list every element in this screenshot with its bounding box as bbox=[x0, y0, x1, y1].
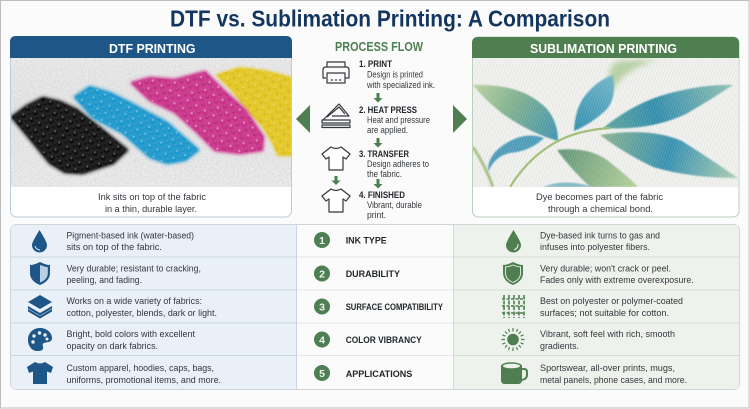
heading: SUBLIMATION PRINTING bbox=[530, 41, 677, 56]
arrow: step 1 to 2 bbox=[374, 93, 382, 102]
icon: sun bbox=[502, 328, 524, 351]
DTF ink type text bbox=[66, 230, 194, 253]
step 1 text: 1. PRINT bbox=[359, 59, 392, 70]
DTF applications text bbox=[66, 363, 221, 386]
icon: finished t-shirt bbox=[322, 189, 350, 212]
arrow: pointing to DTF panel bbox=[296, 105, 310, 133]
DTF ink type text: Pigment-based ink (water-based) bbox=[66, 230, 194, 242]
caption: in a thin, durable layer. bbox=[105, 204, 197, 215]
icon: blue drop bbox=[32, 230, 47, 253]
row 1: ink type: 1 bbox=[319, 235, 325, 247]
photo: ink droplets on fabric bbox=[11, 58, 292, 187]
header bar bbox=[472, 37, 739, 58]
sublimation applications text bbox=[540, 363, 687, 386]
process flow heading: PROCESS FLOW bbox=[335, 39, 424, 54]
icon: palette bbox=[28, 328, 52, 351]
caption: Ink sits on top of the fabric bbox=[98, 192, 206, 203]
heading: DTF PRINTING bbox=[109, 41, 196, 56]
icon: blue shield bbox=[30, 262, 50, 285]
step 2 text bbox=[359, 105, 430, 136]
DTF durability text: peeling, and fading. bbox=[66, 275, 142, 286]
process flow bbox=[322, 39, 435, 221]
step 2 text: are applied. bbox=[367, 125, 408, 136]
step 3 text: the fabric. bbox=[367, 169, 402, 180]
sublimation ink type text: Dye-based ink turns to gas and bbox=[540, 230, 660, 242]
arrow: pointing to sublimation panel bbox=[453, 105, 467, 133]
DTF color vibrancy text: opacity on dark fabrics. bbox=[66, 341, 158, 352]
DTF applications text: Custom apparel, hoodies, caps, bags, bbox=[66, 363, 214, 374]
panel: sublimation printing bbox=[472, 37, 739, 217]
sublimation column background bbox=[453, 225, 739, 389]
title: DTF vs. Sublimation Printing: A Comparison bbox=[170, 6, 610, 32]
sublimation durability text bbox=[540, 264, 694, 286]
icon: polyester weave bbox=[502, 295, 525, 318]
row 3: surface compatibility bbox=[314, 298, 443, 314]
icon: mug bbox=[501, 362, 527, 384]
icon: layers bbox=[28, 295, 52, 318]
DTF surface compatibility text: Works on a wide variety of fabrics: bbox=[66, 296, 202, 307]
sublimation durability text: Fades only with extreme overexposure. bbox=[540, 275, 694, 286]
DTF surface compatibility text bbox=[66, 296, 217, 319]
step 2 text: Heat and pressure bbox=[367, 115, 430, 126]
step 4 text bbox=[359, 190, 422, 221]
step 3 text: Design adheres to bbox=[367, 159, 429, 170]
step 4 text: print. bbox=[367, 210, 386, 221]
row 2: durability: DURABILITY bbox=[346, 269, 401, 280]
DTF durability text: Very durable; resistant to cracking, bbox=[66, 264, 201, 274]
step 4 text: 4. FINISHED bbox=[359, 190, 405, 201]
sublimation surface compatibility text: Best on polyester or polymer-coated bbox=[540, 296, 683, 307]
panel: DTF printing bbox=[10, 36, 292, 217]
DTF ink type text: sits on top of the fabric. bbox=[66, 242, 162, 253]
sublimation color vibrancy text: Vibrant, soft feel with rich, smooth bbox=[540, 329, 675, 340]
icon: green shield bbox=[503, 262, 523, 285]
caption bbox=[536, 192, 663, 215]
step 1 text: Design is printed bbox=[367, 70, 423, 80]
DTF color vibrancy text: Bright, bold colors with excellent bbox=[66, 329, 195, 340]
table background bbox=[10, 224, 740, 390]
sublimation applications text: Sportswear, all-over prints, mugs, bbox=[540, 363, 675, 374]
sublimation color vibrancy text bbox=[540, 329, 675, 352]
row 1: ink type: INK TYPE bbox=[346, 236, 387, 247]
row 1: ink type bbox=[314, 232, 387, 248]
step 4 text: Vibrant, durable bbox=[367, 200, 422, 211]
sublimation color vibrancy text: gradients. bbox=[540, 341, 579, 352]
step 3 text: 3. TRANSFER bbox=[359, 149, 409, 160]
row 5: applications bbox=[314, 365, 413, 381]
DTF column background bbox=[11, 225, 296, 389]
DTF applications text: uniforms, promotional items, and more. bbox=[66, 375, 221, 386]
sublimation ink type text: infuses into polyester fibers. bbox=[540, 242, 650, 253]
step 3 text bbox=[359, 149, 429, 180]
step 1 text: with specialized ink. bbox=[366, 80, 435, 91]
panel body bbox=[472, 37, 739, 217]
DTF color vibrancy text bbox=[66, 329, 195, 352]
DTF surface compatibility text: cotton, polyester, blends, dark or light. bbox=[66, 308, 217, 319]
row 3: surface compatibility: SURFACE COMPATIBILITY bbox=[346, 302, 443, 313]
sublimation surface compatibility text bbox=[540, 296, 683, 319]
caption: Dye becomes part of the fabric bbox=[536, 192, 663, 203]
icon: heat press bbox=[322, 104, 350, 128]
step 2 text: 2. HEAT PRESS bbox=[359, 105, 417, 116]
sublimation ink type text bbox=[540, 230, 660, 253]
sublimation surface compatibility text: surfaces; not suitable for cotton. bbox=[540, 308, 669, 319]
caption bbox=[98, 192, 206, 215]
row 4: color vibrancy bbox=[314, 332, 422, 348]
step 1 text bbox=[359, 59, 435, 91]
comparison table bbox=[10, 224, 740, 390]
row 4: color vibrancy: 4 bbox=[319, 334, 325, 346]
row 5: applications: 5 bbox=[319, 368, 325, 380]
arrow: step 3 to 4 bbox=[374, 179, 382, 188]
icon: printer bbox=[323, 62, 349, 83]
row 5: applications: APPLICATIONS bbox=[346, 369, 413, 380]
sublimation durability text: Very durable; won't crack or peel. bbox=[540, 264, 671, 274]
panel body bbox=[10, 36, 292, 217]
caption: through a chemical bond. bbox=[548, 204, 653, 215]
arrow: shirt to finished shirt bbox=[332, 176, 340, 185]
row 3: surface compatibility: 3 bbox=[319, 301, 325, 313]
icon: t-shirt bbox=[322, 147, 350, 170]
icon: green drop bbox=[506, 230, 521, 253]
header bar bbox=[10, 36, 292, 58]
DTF durability text bbox=[66, 264, 201, 286]
arrow: step 2 to 3 bbox=[374, 138, 382, 148]
row 2: durability bbox=[314, 266, 401, 282]
photo: leaf print on fabric bbox=[473, 58, 738, 187]
sublimation applications text: metal panels, phone cases, and more. bbox=[540, 375, 687, 386]
row 2: durability: 2 bbox=[319, 268, 325, 280]
icon: blue t-shirt bbox=[27, 362, 53, 384]
row 4: color vibrancy: COLOR VIBRANCY bbox=[346, 335, 422, 346]
